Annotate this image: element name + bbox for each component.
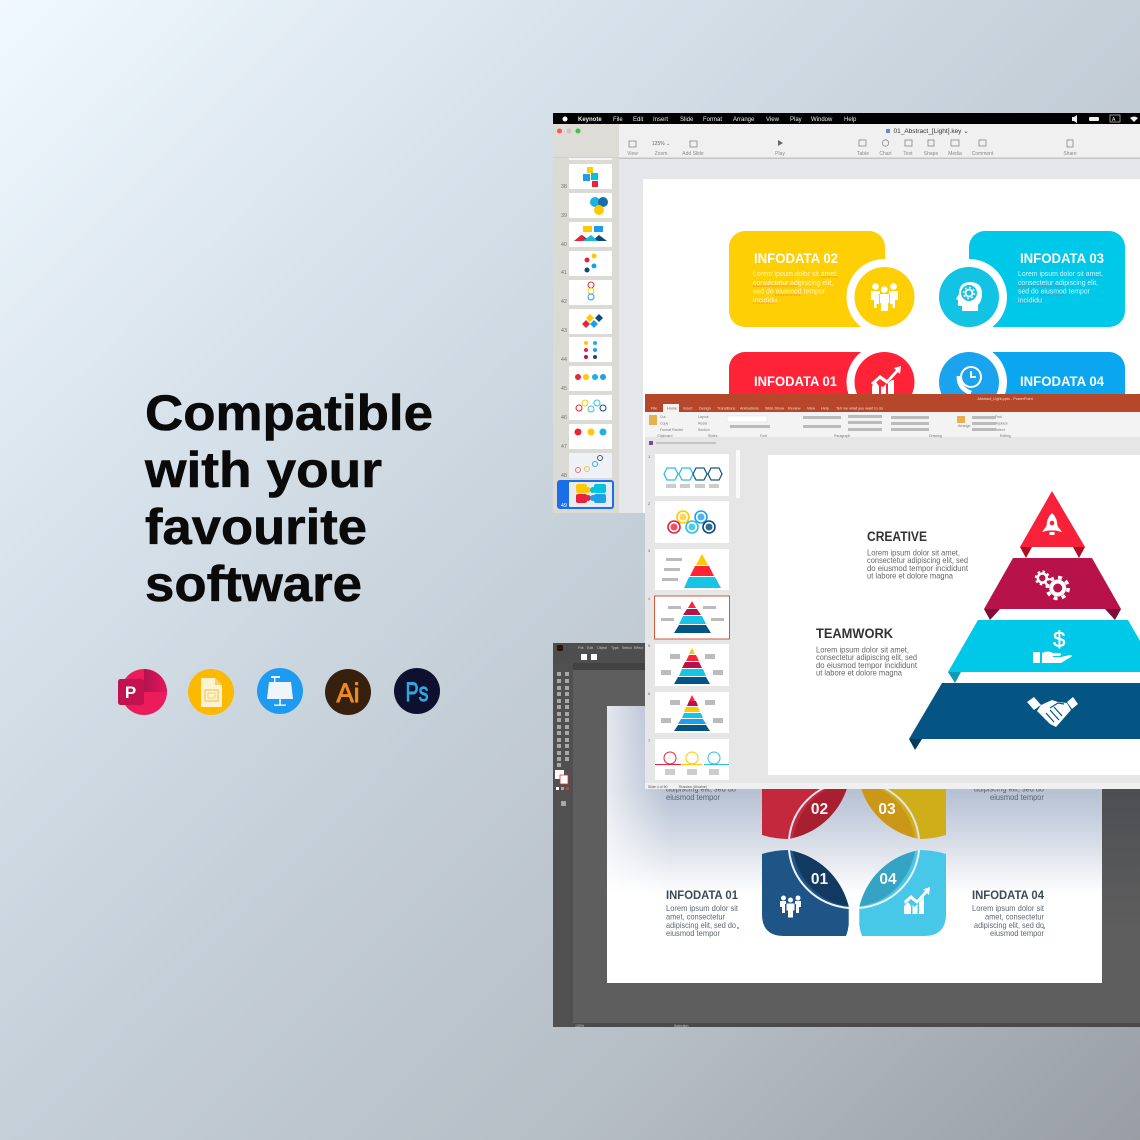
icon: handshake xyxy=(1027,697,1078,727)
panel: PowerPoint window xyxy=(645,394,1140,789)
artboard xyxy=(607,706,1102,983)
thumbnail 4 xyxy=(661,601,724,633)
PowerPoint ribbon: Cut xyxy=(660,415,665,419)
card: INFODATA 03: incididu xyxy=(1018,296,1042,304)
Keynote menu bar: Keynote xyxy=(578,117,602,123)
petal 01 xyxy=(762,850,849,936)
text: CREATIVE: ut labore et dolore magna xyxy=(867,570,953,580)
Keynote slide canvas xyxy=(643,179,1140,513)
PowerPoint ribbon: Format Painter xyxy=(660,428,684,432)
icon: clock phone xyxy=(959,367,981,393)
card: INFODATA 02: Lorem ipsum dolor sit amet, xyxy=(753,269,838,278)
thumbnail 6 xyxy=(661,695,723,731)
text: CREATIVE xyxy=(867,529,969,580)
thumbnail scrollbar xyxy=(736,450,740,498)
text: INFODATA 01: INFODATA 01 xyxy=(666,890,739,902)
Keynote menu bar: Arrange xyxy=(733,117,755,123)
software icons row xyxy=(118,668,440,715)
petal 04 xyxy=(859,850,946,936)
pyramid tier 1 red xyxy=(1020,491,1085,558)
PowerPoint thumbnails: 2 xyxy=(648,501,651,506)
text: TEAMWORK: Lorem ipsum dolor sit amet, xyxy=(816,644,909,654)
card: INFODATA 03: sed do eiusmod tempor xyxy=(1018,286,1090,296)
PowerPoint title bar and tabs: Home xyxy=(667,406,677,410)
icon: hand with dollar xyxy=(1033,627,1072,663)
PowerPoint thumbnails: 5 xyxy=(648,643,651,648)
Keynote menu bar: Help xyxy=(844,117,857,123)
icon: PowerPoint: P xyxy=(125,683,136,702)
text: INFODATA 04: amet, consectetur xyxy=(985,912,1044,922)
petal numbers: 03 xyxy=(878,801,896,818)
Keynote slide sidebar: 44 xyxy=(561,357,567,363)
PowerPoint title bar and tabs: Slide Show xyxy=(765,406,784,410)
PowerPoint status bar: Slide 4 of 50 xyxy=(648,785,668,789)
PowerPoint ribbon: Copy xyxy=(660,422,668,426)
icon: rocket xyxy=(1042,513,1062,535)
text: INFODATA 04: eiusmod tempor xyxy=(990,928,1044,938)
pyramid tier 4 navy xyxy=(909,683,1140,750)
Keynote slide sidebar: 42 xyxy=(561,299,567,305)
quick access bar xyxy=(649,441,653,445)
PowerPoint ribbon: Paragraph xyxy=(834,434,850,438)
text: INFODATA 01: amet, consectetur xyxy=(666,912,725,922)
Keynote menu bar: Play xyxy=(790,117,802,123)
PowerPoint thumbnails xyxy=(648,450,740,780)
card: INFODATA 03: consectetur adipiscing elit, xyxy=(1018,278,1098,287)
Keynote slide sidebar: 43 xyxy=(561,328,567,334)
PowerPoint title bar and tabs: Abstract_Light.pptx - PowerPoint xyxy=(977,397,1034,401)
Keynote menu bar: Window xyxy=(811,117,833,123)
PowerPoint title bar and tabs xyxy=(645,394,1140,412)
PowerPoint thumbnails: 1 xyxy=(648,454,651,459)
PowerPoint title bar and tabs: File xyxy=(651,406,657,410)
text: TEAMWORK xyxy=(816,626,918,678)
Keynote toolbar xyxy=(553,124,1140,159)
PowerPoint thumbnails: 4 xyxy=(648,596,651,601)
PowerPoint title bar and tabs: View xyxy=(807,406,815,410)
icon: people xyxy=(780,896,801,918)
text: INFODATA 01: adipiscing elit, sed do xyxy=(666,920,736,930)
text: CREATIVE: Lorem ipsum dolor sit amet, xyxy=(867,548,960,558)
Keynote toolbar: Zoom xyxy=(655,151,667,157)
text: INFODATA 03 tail: eiusmod tempor xyxy=(990,792,1044,802)
icon: Keynote xyxy=(257,668,303,714)
Keynote slide sidebar: 41 xyxy=(561,270,567,276)
card: INFODATA 01 xyxy=(729,352,914,394)
text: INFODATA 02 tail xyxy=(666,784,736,802)
Keynote menu bar xyxy=(553,113,1140,124)
PowerPoint title bar and tabs: Animations xyxy=(740,406,759,410)
Keynote toolbar: 125% ⌄ xyxy=(652,141,670,147)
thumbnail 1 xyxy=(664,468,722,488)
Illustrator top bars: Edit xyxy=(587,646,593,650)
PowerPoint title bar and tabs: Help xyxy=(821,406,829,410)
Illustrator top bars: File xyxy=(578,646,584,650)
Keynote toolbar: Table xyxy=(857,151,869,157)
petal numbers xyxy=(811,801,897,888)
PowerPoint slide xyxy=(768,455,1140,775)
text: INFODATA 04: adipiscing elit, sed do xyxy=(974,920,1044,930)
PowerPoint ribbon: Drawing xyxy=(929,434,942,438)
selected slide highlight xyxy=(557,480,614,509)
Keynote menu bar: Slide xyxy=(680,117,694,123)
Keynote toolbar: Media xyxy=(948,151,962,157)
PowerPoint title bar and tabs: Transitions xyxy=(717,406,736,410)
card: INFODATA 02: incididu xyxy=(753,296,777,304)
card: INFODATA 03 xyxy=(939,231,1125,327)
icon: hand with dollar: $ xyxy=(1053,627,1065,652)
PowerPoint ribbon xyxy=(645,412,1140,445)
icon: Photoshop xyxy=(394,668,440,714)
dark right shadow xyxy=(1102,789,1140,929)
petal numbers: 04 xyxy=(879,871,897,888)
icon: Photoshop: Ps xyxy=(406,677,428,707)
Illustrator top bars xyxy=(553,643,1140,670)
PowerPoint ribbon: Reset xyxy=(698,422,707,426)
Keynote slide sidebar xyxy=(553,158,619,513)
PowerPoint title bar and tabs: Insert xyxy=(683,406,693,410)
text: INFODATA 04 xyxy=(972,890,1045,938)
Keynote toolbar: Comment xyxy=(972,151,994,157)
Keynote toolbar: Chart xyxy=(879,151,892,157)
Illustrator status bar: Selection xyxy=(674,1024,688,1028)
Keynote toolbar: Text xyxy=(903,151,913,157)
Keynote toolbar: Add Slide xyxy=(682,151,704,157)
PowerPoint title bar and tabs: Design xyxy=(699,406,711,410)
PowerPoint status bar xyxy=(645,783,1140,789)
panel: Illustrator window xyxy=(553,643,1140,1028)
card: INFODATA 01: INFODATA 01 xyxy=(754,374,837,389)
card: INFODATA 04 xyxy=(939,352,1125,394)
icon: Illustrator: Ai xyxy=(336,678,360,708)
text: INFODATA 02 tail: eiusmod tempor xyxy=(666,792,720,802)
spellcheck underlines xyxy=(753,277,1103,303)
pyramid tier 3 cyan xyxy=(948,620,1140,683)
Illustrator top bars: Type xyxy=(611,646,619,650)
text: CREATIVE: consectetur adipiscing elit, sed xyxy=(867,555,968,565)
PowerPoint ribbon: Slides xyxy=(708,434,718,438)
text: INFODATA 04: INFODATA 04 xyxy=(972,890,1045,902)
text: TEAMWORK: ut labore et dolore magna xyxy=(816,668,902,678)
text: CREATIVE: CREATIVE xyxy=(867,529,927,544)
Illustrator top bars: Effect xyxy=(634,646,643,650)
Illustrator status bar xyxy=(573,1023,1140,1028)
PowerPoint ribbon: Font xyxy=(760,434,767,438)
Keynote slide sidebar: 45 xyxy=(561,386,567,392)
icon: Google Slides xyxy=(188,669,234,715)
PowerPoint title bar and tabs: Review xyxy=(788,406,801,410)
Illustrator top bars: Object xyxy=(597,646,607,650)
petal numbers: 02 xyxy=(811,801,828,818)
text: CREATIVE: do eiusmod tempor incididunt xyxy=(867,563,969,573)
text: TEAMWORK: do eiusmod tempor incididunt xyxy=(816,660,918,670)
PowerPoint title bar and tabs: Tell me what you want to do xyxy=(836,406,883,410)
panel: Keynote window xyxy=(553,113,1140,513)
Keynote slide sidebar: 48 xyxy=(561,473,567,479)
Keynote slide sidebar: 46 xyxy=(561,415,567,421)
Keynote menu bar: A xyxy=(1112,117,1116,123)
PowerPoint thumbnails: 7 xyxy=(648,738,651,743)
card: INFODATA 03: INFODATA 03 xyxy=(1020,251,1104,266)
thumbnail graphics xyxy=(574,167,608,503)
title xyxy=(144,385,433,612)
Illustrator top bars: Select xyxy=(622,646,632,650)
text: TEAMWORK: consectetur adipiscing elit, sed xyxy=(816,652,917,662)
icon: head with gear xyxy=(956,282,982,311)
thumbnail 5 xyxy=(661,648,723,684)
Keynote toolbar: Shape xyxy=(924,151,938,157)
icon: gears xyxy=(1036,572,1068,598)
Keynote toolbar: Play xyxy=(775,151,785,157)
PowerPoint ribbon: Select xyxy=(995,428,1005,432)
PowerPoint thumbnails: 6 xyxy=(648,691,651,696)
Keynote toolbar: View xyxy=(627,151,638,157)
PowerPoint ribbon: Find xyxy=(995,415,1002,419)
Illustrator status bar: 100% xyxy=(575,1024,584,1028)
pyramid tier 2 maroon xyxy=(984,558,1121,620)
text: INFODATA 02 tail: adipiscing elit, sed do xyxy=(666,784,736,794)
title: with your xyxy=(144,442,382,498)
icon: growth chart xyxy=(904,887,930,914)
PowerPoint ribbon: Replace xyxy=(995,422,1008,426)
Keynote menu bar: Edit xyxy=(633,117,644,123)
card: INFODATA 02: INFODATA 02 xyxy=(754,251,838,266)
icon: Illustrator xyxy=(325,669,371,715)
PowerPoint ribbon: Editing xyxy=(1000,434,1011,438)
Keynote slide sidebar: 38 xyxy=(561,184,567,190)
card: INFODATA 02 xyxy=(729,231,914,327)
Keynote menu bar: View xyxy=(766,117,780,123)
thumbnail 7 xyxy=(655,752,729,775)
petal 02 xyxy=(762,753,849,839)
petal numbers: 01 xyxy=(811,871,828,888)
card: INFODATA 03: Lorem ipsum dolor sit amet, xyxy=(1018,269,1103,278)
Keynote slide sidebar: 39 xyxy=(561,213,567,219)
icon: team xyxy=(871,283,898,311)
Illustrator tool panel xyxy=(553,663,573,1027)
Keynote slide sidebar: 49 xyxy=(561,503,567,509)
PowerPoint ribbon: Layout xyxy=(698,415,709,419)
card: INFODATA 04: INFODATA 04 xyxy=(1020,374,1104,389)
thumbnail 3 xyxy=(662,554,721,588)
icon: PowerPoint xyxy=(118,669,167,715)
text: INFODATA 04: Lorem ipsum dolor sit xyxy=(972,903,1045,913)
Keynote slide sidebar: 40 xyxy=(561,242,567,248)
title: favourite xyxy=(145,499,367,555)
text: INFODATA 01 xyxy=(666,890,739,938)
text: INFODATA 01: Lorem ipsum dolor sit xyxy=(666,903,739,913)
Keynote menu bar: File xyxy=(613,117,623,123)
text: INFODATA 01: eiusmod tempor xyxy=(666,928,720,938)
Keynote toolbar: 01_Abstract_[Light].key ⌄ xyxy=(894,128,969,135)
Keynote menu bar: Insert xyxy=(653,117,668,123)
Keynote slide sidebar: 47 xyxy=(561,444,567,450)
text: INFODATA 03 tail: adipiscing elit, sed do xyxy=(974,784,1044,794)
title: software xyxy=(145,556,362,612)
PowerPoint status bar: Russian (Ukraine) xyxy=(679,785,707,789)
text: INFODATA 03 tail xyxy=(974,784,1044,802)
title: Compatible xyxy=(145,385,433,441)
card: INFODATA 02: consectetur adipiscing elit, xyxy=(753,278,833,287)
PowerPoint ribbon: Section xyxy=(698,428,710,432)
thumbnail 2 xyxy=(668,511,715,533)
icon: chart xyxy=(871,366,901,394)
PowerPoint ribbon: Clipboard xyxy=(658,434,673,438)
Keynote menu bar: Format xyxy=(703,117,722,123)
petal 03 xyxy=(859,753,946,839)
text: TEAMWORK: TEAMWORK xyxy=(816,626,893,641)
PowerPoint thumbnails: 3 xyxy=(648,548,651,553)
card: INFODATA 02: sed do eiusmod tempor xyxy=(753,286,825,296)
PowerPoint ribbon: Arrange xyxy=(958,424,971,428)
Keynote toolbar: Share xyxy=(1063,151,1077,157)
